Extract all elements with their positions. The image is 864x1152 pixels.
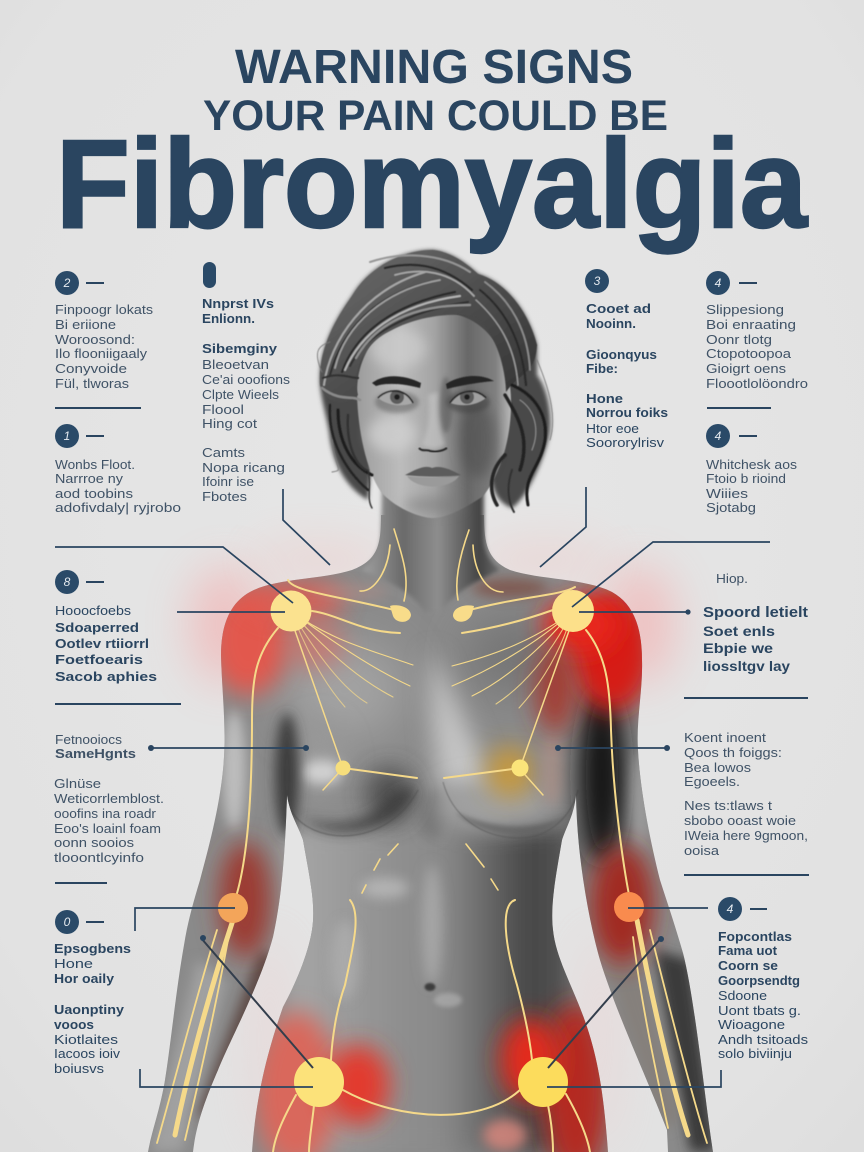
text block: Sdoone — [718, 988, 767, 1003]
ambient pain glow behind body — [189, 542, 676, 1150]
text block: Sacob aphies — [55, 669, 157, 684]
text block: Hone — [54, 956, 93, 971]
badge 4 bottom: 4 — [727, 902, 734, 916]
pain nodes — [218, 590, 644, 1107]
text block: lower: Egoeels. — [684, 774, 740, 789]
illustration: woman's figure — [140, 250, 730, 1152]
text block: Oonr tlotg — [706, 332, 772, 347]
badge 4 lower — [706, 424, 757, 448]
leader dots — [148, 609, 691, 942]
badge 0 — [55, 910, 104, 934]
text block 1: aod toobins — [55, 486, 134, 501]
text block: boiusvs — [54, 1061, 105, 1076]
text block lower: Wiiies — [706, 486, 749, 501]
title: WARNING SIGNS — [235, 41, 633, 94]
panel: lower right — [718, 897, 809, 1061]
text block: lower: Weticorrlemblost. — [54, 791, 164, 806]
text block body: Floool — [202, 402, 244, 417]
text block: lower: Bea lowos — [684, 760, 752, 775]
text block: lower: Eoo's loainl foam — [54, 821, 161, 836]
text block: Sdoaperred — [55, 620, 139, 635]
panel: second column — [202, 262, 291, 504]
badge 8 — [55, 570, 104, 594]
text: hiop: Hiop. — [716, 571, 748, 586]
text block — [586, 301, 668, 450]
text block — [55, 603, 157, 684]
text block body: Ce'ai ooofions — [202, 372, 291, 387]
text block: Htor eoe — [586, 421, 639, 436]
nerve pathways — [157, 529, 707, 1152]
text block: lower: IWeia here 9gmoon, — [684, 828, 808, 843]
leader lines — [55, 487, 770, 1087]
text block: Goorpsendtg — [718, 973, 800, 988]
text block 1: Narrroe ny — [55, 471, 124, 486]
text block: Spoord letielt — [703, 604, 808, 621]
text block: Gioigrt oens — [706, 361, 787, 376]
neck — [362, 488, 500, 612]
text block: Andh tsitoads — [718, 1032, 809, 1047]
text block: Fopcontlas — [718, 929, 792, 944]
text block: Kiotlaites — [54, 1032, 119, 1047]
text block: Gioonqyus — [586, 347, 657, 362]
text block body: Camts — [202, 445, 246, 460]
eyes — [378, 390, 486, 405]
torso shading — [285, 617, 575, 1000]
text block: Wioagone — [718, 1017, 785, 1032]
panel: upper right column — [706, 271, 808, 515]
node: left hip — [294, 1057, 344, 1107]
badge 8: 8 — [64, 575, 71, 589]
text block: lower: tlooontlcyinfo — [54, 850, 144, 865]
title — [56, 41, 808, 254]
panel: upper left column — [55, 271, 181, 515]
body silhouette — [140, 510, 730, 1152]
abdomen base — [285, 825, 575, 1152]
node: right chest — [512, 760, 528, 776]
text block: Epsogbens — [54, 941, 131, 956]
badge 1 — [55, 424, 104, 448]
panel: middle right — [684, 571, 808, 858]
text block: Coorn se — [718, 958, 778, 973]
text block: Cooet ad — [586, 301, 651, 316]
text block: lower: oonn sooios — [54, 835, 135, 850]
text block: Foetfoearis — [55, 652, 143, 667]
eyebrows — [372, 376, 494, 389]
text block 1: Wonbs Floot. — [55, 457, 135, 472]
text block 2 — [55, 302, 154, 391]
text block: Slippesiong — [706, 302, 784, 317]
red inflammation overlays — [208, 578, 654, 1152]
panel: middle left — [54, 570, 164, 865]
badge 2 — [55, 271, 104, 295]
text block: lower: sbobo ooast woie — [684, 813, 796, 828]
text block body: Hing cot — [202, 416, 257, 431]
text block lower: Ftoio b rioind — [706, 471, 786, 486]
badge 0: 0 — [64, 915, 71, 929]
nose — [419, 448, 447, 452]
panel: lower left — [54, 910, 131, 1076]
text block: lower: Nes ts:tlaws t — [684, 798, 772, 813]
right breast — [435, 735, 578, 838]
text block 2: Bi eriione — [55, 317, 116, 332]
arm shading — [150, 683, 716, 1152]
text block: Ebpie we — [703, 640, 773, 656]
text block: lower: Glnüse — [54, 776, 101, 791]
text block — [703, 604, 808, 674]
text block: lower: Fetnooiocs — [55, 732, 123, 747]
text block: Nooinn. — [586, 316, 636, 331]
text block: Hor oaily — [54, 971, 115, 986]
text block 1: adofivdaly| ryjrobo — [55, 500, 181, 515]
text block body: Nopa ricang — [202, 460, 285, 475]
text block heading: Enlionn. — [202, 311, 255, 326]
text block: lower: SameHgnts — [55, 746, 136, 761]
text block: vooos — [54, 1017, 94, 1032]
text block heading — [202, 296, 278, 356]
text block: liossltgv lay — [703, 658, 790, 674]
node: right hip — [518, 1057, 568, 1107]
text block: lower: ooofins ina roadr — [54, 806, 157, 821]
text block: Boi enraating — [706, 317, 796, 332]
title: Fibromyalgia — [56, 115, 808, 254]
badge 4: 4 — [715, 276, 722, 290]
title: YOUR PAIN COULD BE — [203, 92, 668, 140]
text block 2: Ilo flooniigaaly — [55, 346, 148, 361]
text block: lower: ooisa — [684, 843, 720, 858]
clavicle capsules — [390, 605, 474, 622]
text block body: Bleoetvan — [202, 357, 269, 372]
navel — [424, 983, 436, 991]
badge 1: 1 — [64, 429, 70, 443]
node: right elbow — [614, 892, 644, 922]
text block — [718, 929, 809, 1061]
text block: Hone — [586, 391, 623, 406]
text block 2: Fül, tlworas — [55, 376, 130, 391]
badge 4 bottom — [718, 897, 767, 921]
left breast — [294, 746, 426, 840]
text block — [54, 941, 131, 1076]
text block heading: Sibemginy — [202, 341, 278, 356]
node: left elbow — [218, 893, 248, 923]
text block: Ootlev rtiiorrl — [55, 636, 149, 651]
text block: lower: Koent inoent — [684, 730, 766, 745]
text block: Norrou foiks — [586, 405, 668, 420]
text block body — [202, 357, 291, 504]
text block body: Clpte Wieels — [202, 387, 280, 402]
hair — [317, 250, 553, 512]
node: right shoulder — [552, 590, 594, 632]
text block: Soororylrisv — [586, 435, 665, 450]
text block: lower — [684, 730, 808, 858]
hair back — [320, 250, 550, 508]
section dividers — [55, 407, 809, 884]
text block lower — [706, 457, 798, 515]
badge 3: 3 — [594, 274, 601, 288]
node: left shoulder — [270, 590, 312, 632]
text block 2: Woroosond: — [55, 332, 135, 347]
text block body: Ifoinr ise — [202, 474, 254, 489]
text block: Ctopotoopoa — [706, 346, 792, 361]
text block body: Fbotes — [202, 489, 248, 504]
text block 2: Conyvoide — [55, 361, 127, 376]
panel: third column — [585, 269, 668, 450]
badge 4 — [706, 271, 757, 295]
text block: Iacoos ioiv — [54, 1046, 121, 1061]
text block lower: Sjotabg — [706, 500, 756, 515]
text block 2: Finpoogr lokats — [55, 302, 154, 317]
text block: Floootlolöondro — [706, 376, 808, 391]
text block: solo biviinju — [718, 1046, 792, 1061]
node: left chest — [336, 760, 350, 776]
text block: Fama uot — [718, 943, 778, 958]
text block: Fibe: — [586, 361, 618, 376]
text block: lower: Qoos th foiggs: — [684, 745, 782, 760]
badge 3 — [585, 269, 609, 293]
text block: Uont tbats g. — [718, 1003, 801, 1018]
badge 4 lower: 4 — [715, 429, 722, 443]
face — [357, 312, 511, 518]
badge 2: 2 — [63, 276, 71, 290]
text block: Uaonptiny — [54, 1002, 125, 1017]
lips — [405, 467, 461, 486]
text block — [706, 302, 808, 391]
text block heading: Nnprst IVs — [202, 296, 274, 311]
text block: lower — [54, 732, 164, 865]
text block: Soet enls — [703, 623, 775, 639]
text block: Hooocfoebs — [55, 603, 132, 618]
text block lower: Whitchesk aos — [706, 457, 798, 472]
badge pill — [203, 262, 216, 288]
text block 1 — [55, 457, 181, 515]
